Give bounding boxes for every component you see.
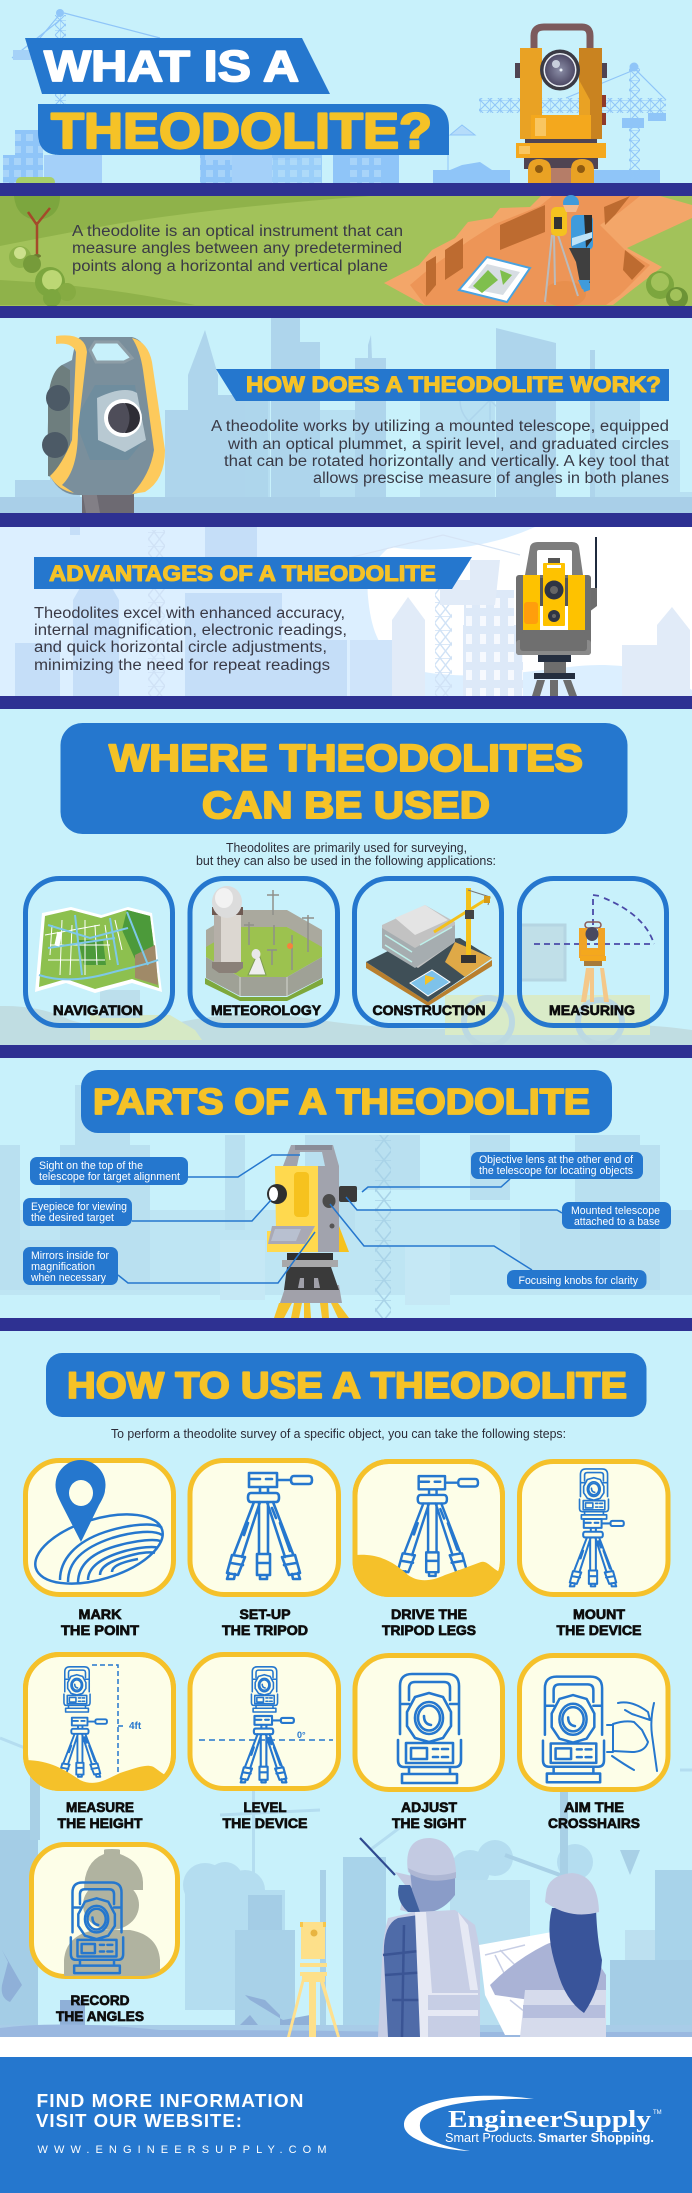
heading banner: [216, 369, 669, 401]
callout: eyepiece: the desired target: [31, 1212, 114, 1224]
man: [378, 1838, 480, 2037]
callout: mirrors: [23, 1247, 118, 1285]
darker grass: [0, 196, 370, 305]
step: record the angles: THE ANGLES: [56, 2008, 144, 2024]
website: WWW.ENGINEERSUPPLY.COM: [38, 2144, 326, 2156]
heading banner: [60, 723, 628, 834]
tripod icon: [570, 1519, 624, 1586]
step: level the device: THE DEVICE: [222, 1815, 308, 1831]
callout: objective lens: Objective lens at the other end of: [479, 1154, 634, 1166]
centre buildings: [200, 125, 475, 183]
left buildings: [3, 130, 102, 183]
small yellow theodolite: [287, 1922, 340, 2037]
callout: sight: [30, 1157, 188, 1185]
construction site: [366, 888, 492, 1006]
tree top: [16, 177, 55, 187]
step: drive the tripod legs: [355, 1462, 503, 1638]
heading banner: CAN BE USED: [202, 785, 490, 827]
intro text: To perform a theodolite survey of a specific object, you can take the following steps:: [111, 1426, 566, 1441]
heading banner: [34, 557, 472, 589]
surveyor: [544, 195, 593, 307]
body text: with an optical plummet, a spirit level, and graduated circles: [227, 436, 669, 453]
callout: mirrors: Mirrors inside for: [31, 1250, 109, 1262]
frame: [26, 1654, 174, 1788]
heading banner: PARTS OF A THEODOLITE: [93, 1081, 590, 1122]
card: meteorology: [190, 878, 338, 1026]
body text: allows prescise measure of angles in both planes: [313, 470, 669, 487]
heading banner: WHERE THEODOLITES: [109, 738, 583, 780]
definition text: A theodolite is an optical instrument that can: [72, 223, 403, 240]
tree: [14, 196, 60, 258]
contour ellipse and pin: [27, 1460, 171, 1597]
callout: mounted telescope: attached to a base: [574, 1216, 660, 1228]
radio antenna: [360, 1838, 395, 1875]
callout: eyepiece: [23, 1198, 132, 1226]
right grass: [625, 232, 692, 305]
label: MOUNT: [573, 1606, 625, 1622]
tripod icon: [398, 1476, 478, 1576]
panel: definition: [0, 195, 692, 309]
label: RECORD: [70, 1992, 130, 2008]
panel: where used: [0, 709, 692, 1046]
faded machinery and hills: [0, 925, 692, 1046]
faded city: [0, 1085, 692, 1318]
step: level the device: [190, 1654, 338, 1831]
callout: focusing knobs: [507, 1270, 646, 1289]
intro text: [196, 841, 496, 868]
logo: EngineerSupply: [448, 2107, 651, 2133]
definition text: measure angles between any predetermined: [72, 240, 402, 257]
body text: [34, 605, 347, 674]
instrument icon: [543, 1677, 604, 1782]
heading banner: HOW TO USE A THEODOLITE: [67, 1365, 627, 1406]
panel: advantages: [0, 527, 692, 696]
theodolite with angle lines: [534, 895, 654, 1002]
frame: [355, 1462, 502, 1594]
section background: header: [0, 0, 692, 183]
intro text: Theodolites are primarily used for surveying,: [226, 841, 467, 855]
step: adjust the sight: [355, 1656, 502, 1831]
callout: mirrors: when necessary: [30, 1272, 106, 1284]
title banner: what is a: WHAT IS A: [44, 42, 299, 91]
label: METEOROLOGY: [211, 1002, 322, 1018]
tripod icon: [227, 1473, 312, 1579]
body text: internal magnification, electronic readings,: [34, 622, 347, 639]
body text: A theodolite works by utilizing a mounted telescope, equipped: [211, 418, 669, 435]
body text: Theodolites excel with enhanced accuracy,: [34, 605, 345, 622]
step: drive the tripod legs: TRIPOD LEGS: [382, 1622, 476, 1638]
trench walls: [426, 196, 645, 297]
person silhouette: [64, 1849, 160, 1976]
logo: Smart Products.: [445, 2131, 536, 2145]
instrument icon: [251, 1667, 278, 1712]
ground mound: [358, 1554, 498, 1592]
label: MEASURE: [66, 1799, 134, 1815]
instrument icon: [398, 1674, 461, 1783]
label: AIM THE: [564, 1799, 624, 1815]
callout: objective lens: the telescope for locating objects: [479, 1165, 633, 1177]
panel: how does it work: [0, 318, 692, 513]
step: set-up the tripod: THE TRIPOD: [222, 1622, 308, 1638]
divider bar: [0, 306, 692, 318]
label: DRIVE THE: [391, 1606, 467, 1622]
title banner: theodolite: THEODOLITE?: [51, 103, 432, 159]
heading banner: ADVANTAGES OF A THEODOLITE: [49, 561, 436, 586]
callout: mounted telescope: [562, 1202, 671, 1229]
body text: and quick horizontal circle adjustments,: [34, 639, 327, 656]
ground mound: [28, 1760, 164, 1786]
instrument icon: [64, 1667, 90, 1712]
divider bar: [0, 1318, 692, 1331]
step: mount the device: [520, 1462, 668, 1638]
excavators: [2, 1950, 310, 2030]
weather station: [205, 886, 323, 1001]
step: mark the point: THE POINT: [61, 1622, 139, 1638]
heading banner: HOW DOES A THEODOLITE WORK?: [246, 372, 661, 397]
label: LEVEL: [244, 1799, 287, 1815]
bottom construction scene: [0, 1700, 692, 2037]
map: [35, 907, 162, 993]
divider bar: [0, 513, 692, 527]
step: set-up the tripod: [190, 1460, 338, 1638]
label: MARK: [78, 1606, 122, 1622]
title banner: what is a: [25, 38, 330, 94]
divider bar: [0, 1045, 692, 1058]
logo: [404, 2096, 662, 2151]
city silhouettes: [15, 527, 690, 696]
step: adjust the sight: THE SIGHT: [392, 1815, 466, 1831]
height marker: 4ft: [129, 1721, 142, 1732]
step: mount the device: THE DEVICE: [556, 1622, 642, 1638]
logo: TM: [653, 2110, 662, 2116]
diagram: theodolite: [267, 1145, 357, 1318]
skyline: [0, 1700, 692, 2030]
label: NAVIGATION: [53, 1002, 143, 1018]
map on ground: [459, 257, 530, 302]
panel: how to use: [0, 1331, 692, 2037]
woman: [490, 1873, 606, 2037]
divider bar: [0, 183, 692, 196]
panel: parts: [0, 1058, 692, 1318]
heading banner: [46, 1353, 646, 1417]
card: measuring: [520, 878, 666, 1026]
right buildings and crane: [433, 62, 666, 183]
dirt path: [384, 196, 692, 305]
icon: yellow theodolite: [516, 537, 597, 696]
card: construction: [354, 878, 502, 1026]
left crane: [12, 9, 160, 183]
step: record the angles: [32, 1844, 178, 2024]
call to action: FIND MORE INFORMATION: [36, 2091, 304, 2111]
call to action: [36, 2091, 304, 2131]
heading banner: [81, 1070, 612, 1133]
level line: [199, 1730, 333, 1740]
callout: focusing knobs: Focusing knobs for clarity: [518, 1275, 638, 1287]
body text: that can be rotated horizontally and vertically. A key tool that: [224, 453, 670, 470]
workers: [360, 1838, 606, 2037]
callout: sight: Sight on the top of the: [39, 1160, 143, 1172]
callout connector lines: [118, 1155, 562, 1283]
height marker: [92, 1665, 142, 1777]
step: aim the crosshairs: [520, 1656, 668, 1831]
skyline: [0, 318, 692, 513]
step: measure the height: [24, 1654, 174, 1831]
bushes: [9, 246, 688, 309]
definition text: [72, 223, 403, 275]
instrument icon: [71, 1883, 123, 1973]
ferris wheel: [460, 370, 520, 430]
level line: 0°: [297, 1730, 306, 1740]
label: SET-UP: [240, 1606, 290, 1622]
icon: orange theodolite: [515, 27, 607, 183]
hand: [607, 1702, 657, 1771]
footer: [0, 2057, 692, 2193]
callout: eyepiece: Eyepiece for viewing: [31, 1201, 127, 1213]
definition text: points along a horizontal and vertical plane: [72, 258, 388, 275]
label: ADJUST: [401, 1799, 457, 1815]
call to action: VISIT OUR WEBSITE:: [36, 2111, 243, 2131]
body text: [211, 418, 670, 487]
callout: sight: telescope for target alignment: [39, 1171, 180, 1183]
header construction skyline: [3, 9, 666, 187]
step: aim the crosshairs: CROSSHAIRS: [548, 1815, 640, 1831]
label: CONSTRUCTION: [372, 1002, 486, 1018]
step: measure the height: THE HEIGHT: [58, 1815, 143, 1831]
callout: mounted telescope: Mounted telescope: [571, 1205, 660, 1217]
icon: grey theodolite close-up: [42, 335, 165, 513]
card: navigation: [26, 878, 172, 1026]
blue background shape: [0, 527, 692, 696]
callout: objective lens: [471, 1152, 643, 1179]
divider bar: [0, 696, 692, 709]
blueprint: [479, 1932, 560, 2035]
tripod icon: [241, 1716, 294, 1782]
callout: mirrors: magnification: [31, 1261, 95, 1273]
label: MEASURING: [549, 1002, 635, 1018]
body text: minimizing the need for repeat readings: [34, 657, 330, 674]
intro text: but they can also be used in the following applications:: [196, 854, 496, 868]
logo: Smarter Shopping.: [538, 2131, 654, 2145]
step: mark the point: [26, 1460, 174, 1638]
instrument icon: [580, 1469, 608, 1519]
tripod icon: [60, 1718, 107, 1777]
